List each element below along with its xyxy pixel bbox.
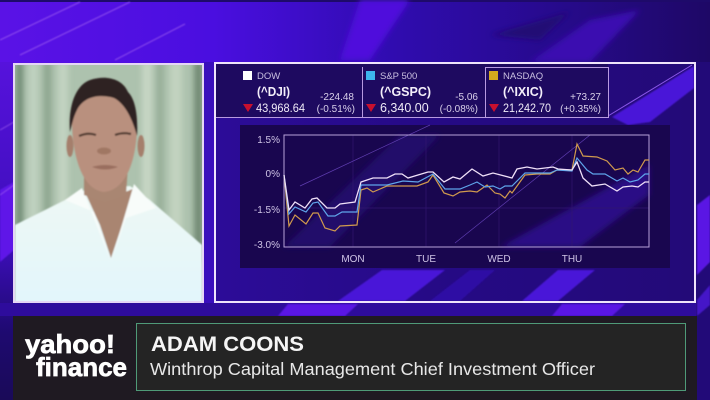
name plate: Winthrop Capital Management Chief Investment Officer: [150, 359, 595, 379]
ticker: S&P 500: 6,340.00: [380, 101, 429, 115]
series: S&P 500: [284, 158, 649, 216]
ticker: S&P 500: (^GSPC): [380, 85, 431, 99]
ticker row: [216, 64, 609, 118]
x axis labels: MON: [341, 254, 365, 265]
series: DOW: [284, 162, 649, 210]
ticker: DOW: 43,968.64: [256, 101, 305, 115]
x axis labels: THU: [562, 254, 582, 265]
panel: presenter video: [14, 62, 203, 302]
name plate: [136, 324, 686, 390]
y axis labels: -1.5%: [254, 205, 280, 216]
name plate: ADAM COONS: [151, 332, 304, 356]
ticker: NASDAQ: (^IXIC): [503, 85, 543, 99]
ticker: S&P 500: (-0.08%): [440, 104, 478, 115]
x axis labels: [341, 254, 582, 265]
x axis labels: WED: [487, 254, 511, 265]
panel diagonal bands: [338, 65, 694, 301]
x axis labels: TUE: [416, 254, 436, 265]
ticker: NASDAQ: (+0.35%): [560, 104, 601, 115]
ticker: DOW: (-0.51%): [317, 104, 355, 115]
ticker: DOW: -224.48: [320, 92, 354, 103]
ticker: S&P 500: S&P 500: [380, 71, 417, 82]
y axis labels: [254, 135, 280, 251]
ticker: DOW: [243, 71, 355, 115]
panel: lower third: [13, 316, 697, 400]
ticker: DOW: (^DJI): [257, 85, 290, 99]
icon: presenter figure: [15, 78, 202, 302]
ticker: NASDAQ: +73.27: [570, 92, 601, 103]
ticker: NASDAQ: 21,242.70: [503, 101, 551, 115]
ticker: NASDAQ: [489, 71, 601, 115]
y axis labels: 1.5%: [257, 135, 280, 146]
ticker: S&P 500: -5.06: [455, 92, 478, 103]
y axis labels: 0%: [266, 169, 280, 180]
photo frame: [14, 64, 203, 302]
series: NASDAQ: [284, 144, 649, 231]
line chart: [240, 125, 670, 268]
panel: market chart frame: [215, 63, 695, 302]
logo: yahoo finance: [25, 329, 127, 382]
ticker: DOW: DOW: [257, 71, 280, 82]
ticker: S&P 500: [366, 71, 478, 115]
ticker: NASDAQ: NASDAQ: [503, 71, 543, 82]
logo: yahoo finance: yahoo!: [25, 329, 115, 359]
y axis labels: -3.0%: [254, 240, 280, 251]
logo: yahoo finance: finance: [36, 352, 127, 382]
